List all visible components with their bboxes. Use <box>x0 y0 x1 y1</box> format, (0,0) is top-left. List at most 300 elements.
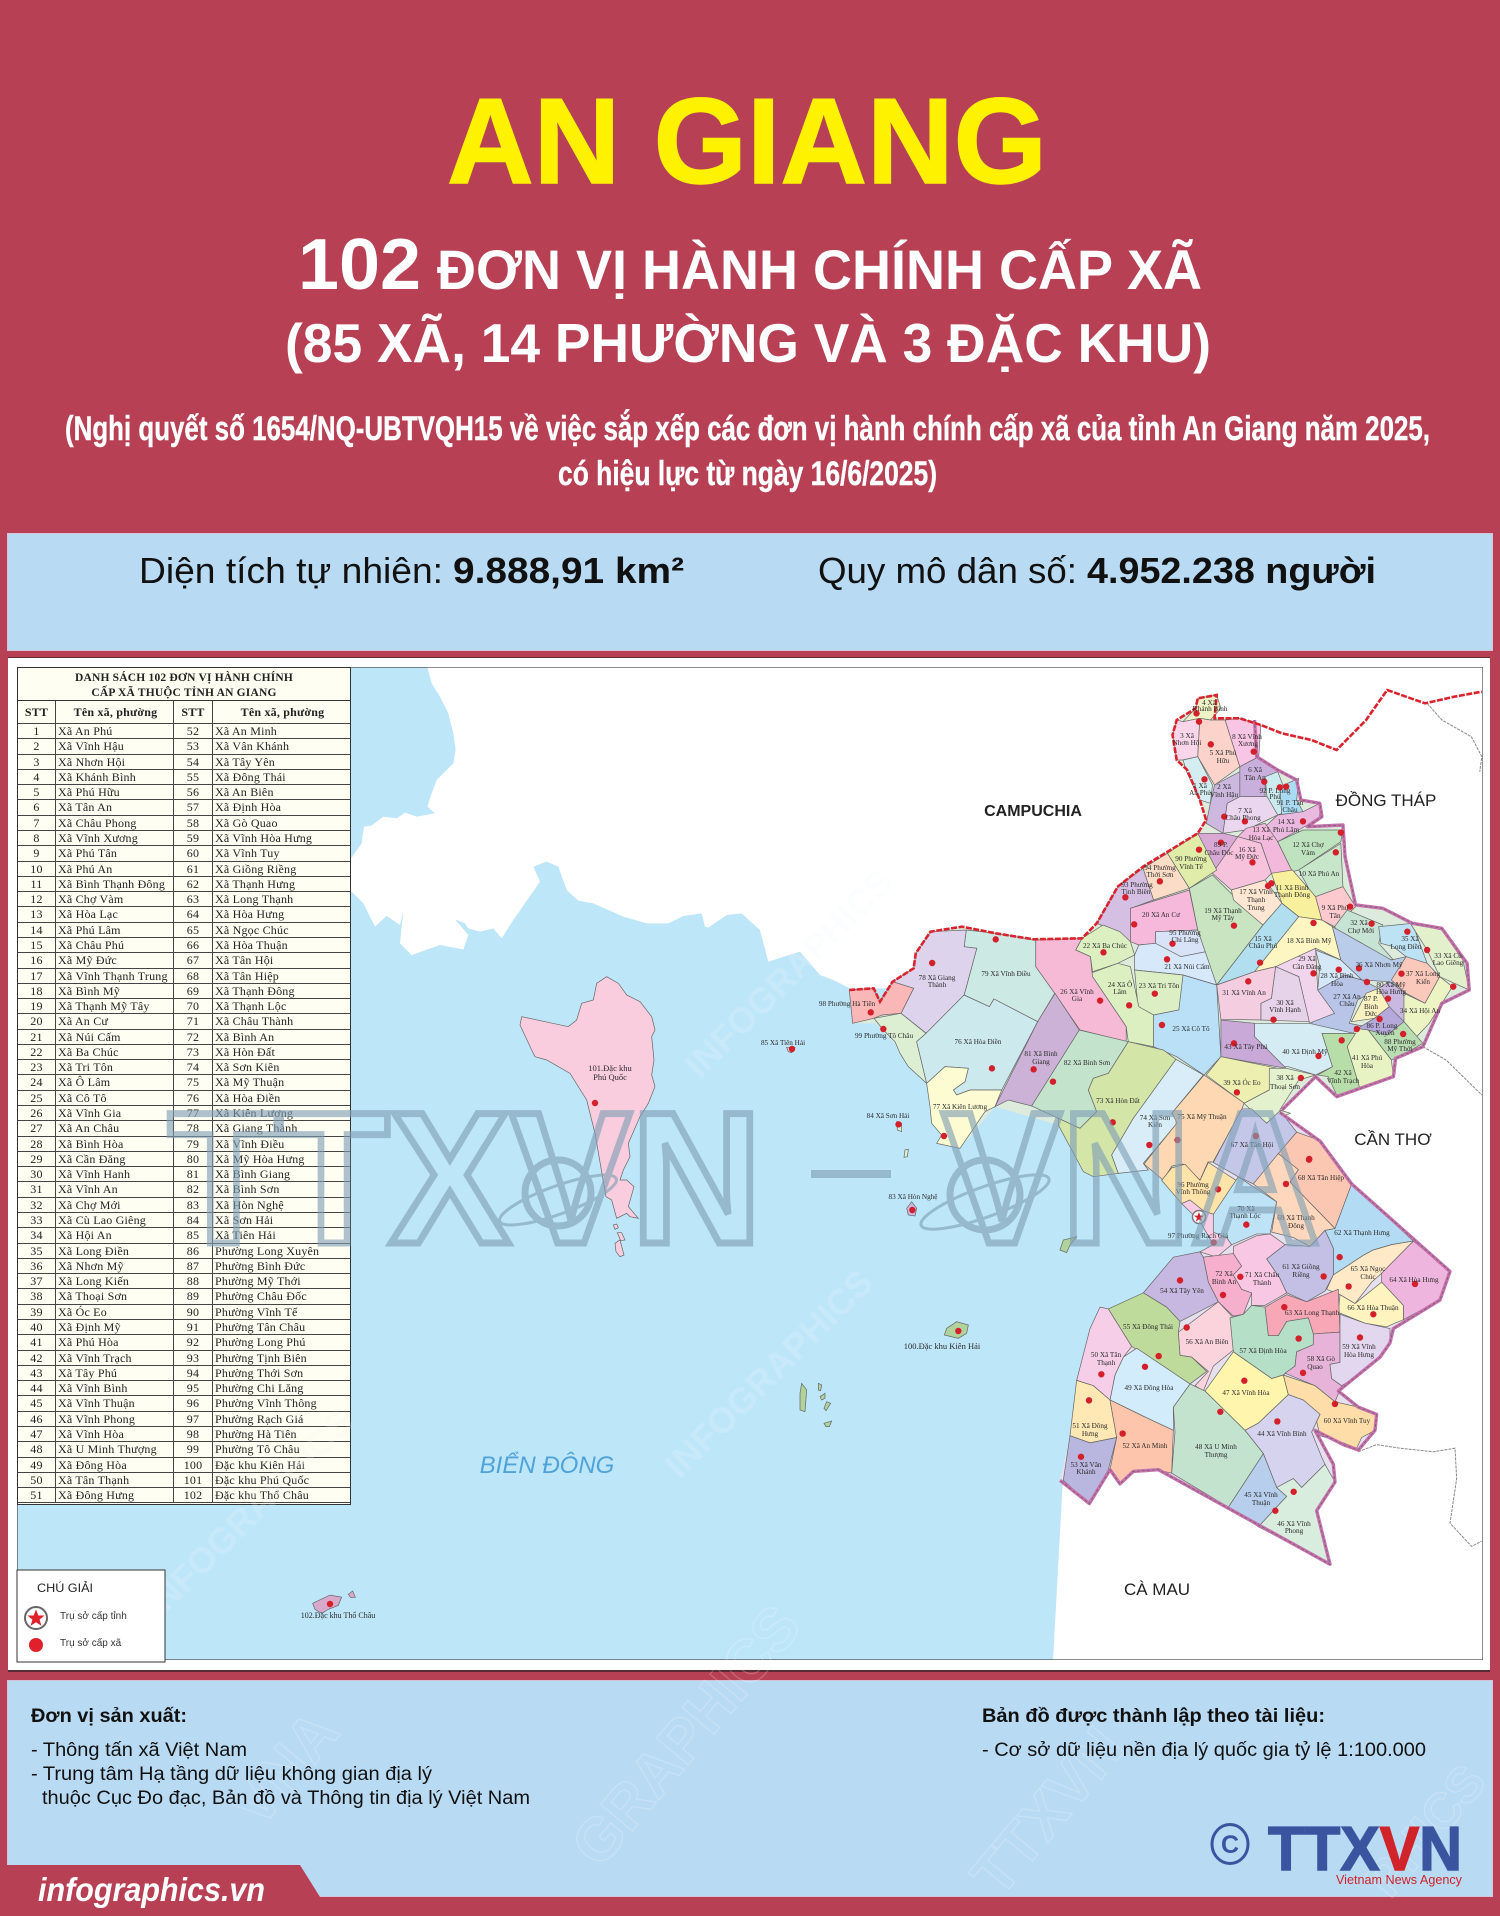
table rows: Xã Mỹ Đức <box>58 953 117 967</box>
commune labels: 77 Xã Kiên Lương <box>933 1103 988 1111</box>
province underlay: south <box>1060 1120 1408 1491</box>
table rows: 69 <box>187 984 199 998</box>
table rows: 56 <box>187 785 199 799</box>
table rows: Phường Long Phú <box>215 1335 306 1349</box>
commune labels: 64 Xã Hòa Hưng <box>1389 1276 1439 1284</box>
commune labels: Vĩnh Tế <box>1179 863 1204 871</box>
commune labels: 55 Xã Đông Thái <box>1123 1323 1173 1331</box>
commune labels: Thạnh <box>1247 896 1266 904</box>
commune labels: Cần Đăng <box>1293 963 1322 971</box>
commune labels <box>301 699 1464 1620</box>
commune labels: Mỹ Tây <box>1212 914 1235 922</box>
commune labels: Vàm <box>1301 849 1315 857</box>
table rows: 24 <box>30 1075 43 1089</box>
table rows: 10 <box>30 862 43 876</box>
islands <box>800 1122 1077 1427</box>
table rows: Xã Đông Thái <box>215 770 286 784</box>
table rows: 15 <box>30 938 43 952</box>
table rows: 83 <box>187 1198 199 1212</box>
table rows: Xã Định Mỹ <box>58 1320 121 1334</box>
table rows: 43 <box>30 1366 43 1380</box>
commune labels: Riềng <box>1292 1271 1310 1279</box>
commune headquarters dots: north <box>868 710 1456 1162</box>
commune labels: 60 Xã Vĩnh Tuy <box>1324 1417 1371 1425</box>
stat: population: Quy mô dân số: <box>818 550 1077 591</box>
table rows: 8 <box>33 831 40 845</box>
table rows: Xã Giang Thành <box>215 1121 298 1135</box>
table rows: Đặc khu Thổ Châu <box>215 1488 309 1502</box>
commune labels: Vĩnh Trạch <box>1327 1077 1360 1085</box>
frontier: red Cambodia border <box>849 690 1482 1002</box>
commune labels: 21 Xã Núi Cấm <box>1164 963 1210 971</box>
commune labels: 98 Phường Hà Tiên <box>819 1000 876 1008</box>
province boundary: pink south <box>1060 1112 1450 1564</box>
commune labels: 7 Xã <box>1238 807 1253 815</box>
commune labels: 39 Xã Óc Eo <box>1223 1077 1261 1087</box>
table rows: 74 <box>187 1060 199 1074</box>
table rows: STT <box>25 705 48 719</box>
table rows: Xã Tân Hiệp <box>215 968 279 982</box>
table rows: 28 <box>30 1137 43 1151</box>
table rows: 20 <box>30 1014 43 1028</box>
map border <box>17 667 1483 1660</box>
commune labels: 87 P. <box>1364 995 1378 1003</box>
table rows: 52 <box>187 724 199 738</box>
table rows: Đặc khu Kiên Hải <box>215 1458 305 1472</box>
commune labels: Mỹ Thới <box>1387 1045 1413 1053</box>
commune labels: 33 Xã Cù <box>1434 952 1462 960</box>
commune labels: 67 Xã Tân Hội <box>1231 1141 1273 1149</box>
commune labels: 17 Xã Vĩnh <box>1239 888 1273 896</box>
table rows: 3 <box>33 755 40 769</box>
table rows: Xã Long Kiến <box>58 1274 129 1288</box>
table rows: Xã Châu Phong <box>58 816 137 830</box>
commune labels: 25 Xã Cô Tô <box>1172 1025 1210 1033</box>
table rows: Xã Nhơn Hội <box>58 755 125 769</box>
table rows: 5 <box>33 785 40 799</box>
table rows: Xã An Phú <box>58 724 112 738</box>
table rows: 21 <box>30 1030 43 1044</box>
table rows: 61 <box>187 862 199 876</box>
commune labels: 18 Xã Bình Mỹ <box>1287 937 1332 945</box>
commune labels: 46 Xã Vĩnh <box>1277 1520 1311 1528</box>
communes: south <box>1063 1109 1450 1564</box>
commune labels: An Phú <box>1189 789 1211 797</box>
commune labels: 101.Đặc khu <box>588 1063 632 1073</box>
table rows: 54 <box>187 755 199 769</box>
table rows: Phường Vĩnh Thông <box>215 1396 317 1410</box>
table rows: Xã An Biên <box>215 785 274 799</box>
table rows: 99 <box>187 1442 199 1456</box>
commune labels: 68 Xã Tân Hiệp <box>1298 1174 1344 1182</box>
table rows: Xã Ba Chúc <box>58 1045 119 1059</box>
table rows: Phường Vĩnh Tế <box>215 1305 298 1319</box>
table rows: 58 <box>187 816 199 830</box>
commune labels: Châu Đốc <box>1205 849 1233 857</box>
logo: TTXVN: C <box>1221 1831 1239 1859</box>
table rows: 23 <box>30 1060 43 1074</box>
commune labels: 5 Xã Phú <box>1210 749 1237 757</box>
table rows: 81 <box>187 1167 199 1181</box>
table rows: Xã Sơn Hải <box>215 1213 273 1227</box>
table rows: 36 <box>30 1259 43 1273</box>
commune labels: 2 Xã <box>1217 783 1232 791</box>
table rows: Xã Giồng Riềng <box>215 862 296 876</box>
province boundary: inner dashes north-east <box>1255 720 1469 1110</box>
commune labels: 54 Xã Tây Yên <box>1160 1287 1204 1295</box>
table rows: 42 <box>30 1351 43 1365</box>
commune labels: Gia <box>1072 995 1083 1003</box>
commune labels: Thành <box>928 981 947 989</box>
table rows: Xã U Minh Thượng <box>58 1442 157 1456</box>
table rows: Xã Long Thạnh <box>215 892 293 906</box>
commune labels: 16 Xã <box>1238 846 1256 854</box>
table rows: Xã An Minh <box>215 724 277 738</box>
commune labels: 23 Xã Tri Tôn <box>1139 982 1180 990</box>
label: Bien Dong: BIỂN ĐÔNG <box>480 1451 614 1479</box>
commune labels: 102.Đặc khu Thổ Châu <box>301 1611 375 1620</box>
table rows: Phường Thới Sơn <box>215 1366 303 1380</box>
table rows: Xã Vĩnh Gia <box>58 1106 121 1120</box>
table rows: 96 <box>187 1396 199 1410</box>
table rows: 40 <box>30 1320 43 1334</box>
land: north coast <box>351 667 1500 988</box>
commune labels: 22 Xã Ba Chúc <box>1083 942 1127 950</box>
table rows: Phường Hà Tiên <box>215 1427 297 1441</box>
table rows: Phường Bình Đức <box>215 1259 305 1273</box>
table rows: Xã Ngọc Chúc <box>215 923 289 937</box>
commune labels: 86 P. Long <box>1367 1022 1398 1030</box>
commune labels: Xuyên <box>1375 1029 1395 1037</box>
commune labels: Kiến <box>1416 978 1430 986</box>
commune labels: Tân <box>1329 912 1341 920</box>
panel: stats background <box>7 533 1493 651</box>
table rows: Xã Hòa Hưng <box>215 907 284 921</box>
table rows: Xã Hòn Nghệ <box>215 1198 284 1212</box>
table rows: 29 <box>30 1152 43 1166</box>
table rows: Xã Chợ Vàm <box>58 892 123 906</box>
logo: TTXVN: Vietnam News Agency <box>1336 1872 1462 1887</box>
footer: producers: Đơn vị sản xuất: <box>31 1706 187 1727</box>
table rows: 51 <box>30 1488 43 1502</box>
commune labels: 93 Phường <box>1121 881 1153 889</box>
table rows: Xã Phú Hữu <box>58 785 120 799</box>
commune labels: 58 Xã Gò <box>1307 1355 1335 1363</box>
commune labels: Châu <box>1339 1000 1355 1008</box>
footer tab <box>0 1865 320 1898</box>
commune labels: 14 Xã <box>1277 818 1295 826</box>
table rows: 26 <box>30 1106 43 1120</box>
table rows: 75 <box>187 1075 199 1089</box>
commune labels: Lao Giêng <box>1433 959 1464 967</box>
table rows: 50 <box>30 1473 43 1487</box>
table rows: 65 <box>187 923 199 937</box>
table rows: 55 <box>187 770 199 784</box>
table rows: 46 <box>30 1412 43 1426</box>
table rows: 48 <box>30 1442 43 1456</box>
table rows: Xã Hòa Lạc <box>58 907 118 921</box>
commune labels: Đức <box>1365 1010 1377 1018</box>
resolution note: có hiệu lực từ ngày 16/6/2025) <box>558 455 937 493</box>
table rows: Xã Hòa Thuận <box>215 938 288 952</box>
table rows: Xã Thạnh Mỹ Tây <box>58 999 150 1013</box>
table rows: 70 <box>187 999 199 1013</box>
legend: commune dot: Trụ sở cấp xã <box>60 1637 122 1649</box>
icon: provincial capital star <box>1192 1210 1206 1224</box>
footer: producers: - Thông tấn xã Việt Nam <box>31 1740 247 1761</box>
table rows: 7 <box>33 816 40 830</box>
table rows: 11 <box>31 877 42 891</box>
commune labels: 47 Xã Vĩnh Hòa <box>1222 1389 1270 1397</box>
commune labels: 52 Xã An Minh <box>1123 1442 1168 1450</box>
commune labels: Thuận <box>1252 1499 1271 1507</box>
commune labels: 24 Xã Ô <box>1108 979 1132 989</box>
table rows: Xã Bình Thạnh Đông <box>58 877 165 891</box>
table rows: Xã Tây Yên <box>215 755 275 769</box>
table rows: Xã Đông Hòa <box>58 1458 127 1472</box>
commune labels: 63 Xã Long Thạnh <box>1285 1309 1340 1317</box>
label: Dong Thap: ĐỒNG THÁP <box>1336 791 1436 810</box>
commune labels: 79 Xã Vĩnh Điều <box>981 970 1031 978</box>
table rows: Xã Phú An <box>58 862 112 876</box>
overlay: header, stats, legend, watermark, footer: INFOGRAPHICS <box>677 861 901 1086</box>
table rows: Xã Vĩnh Hòa <box>58 1427 124 1441</box>
table rows: 12 <box>30 892 43 906</box>
table rows: 47 <box>30 1427 43 1441</box>
table rows: 31 <box>30 1182 43 1196</box>
table rows: Xã Tân Thạnh <box>58 1473 129 1487</box>
legend: provincial star: Trụ sở cấp tỉnh <box>60 1610 127 1622</box>
table rows: 71 <box>187 1014 199 1028</box>
table rows: 6 <box>33 800 40 814</box>
table rows: 89 <box>187 1289 199 1303</box>
commune labels: 65 Xã Ngọc <box>1351 1265 1385 1273</box>
table rows: Xã Vĩnh Bình <box>58 1381 128 1395</box>
commune labels: 31 Xã Vĩnh An <box>1222 989 1266 997</box>
table rows: 16 <box>30 953 43 967</box>
legend: commune dot <box>29 1637 122 1652</box>
commune labels: Châu Phong <box>1225 814 1261 822</box>
commune labels: 76 Xã Hòa Điền <box>955 1038 1002 1046</box>
table rows: 13 <box>30 907 43 921</box>
commune labels: Vĩnh Hạnh <box>1269 1006 1301 1014</box>
special zone dots <box>327 1046 962 1607</box>
commune labels: Hưng <box>1082 1430 1099 1438</box>
commune labels: 27 Xã An <box>1333 993 1361 1001</box>
province boundary: inner dashes south <box>1060 1112 1450 1564</box>
commune labels: Bình <box>1364 1003 1378 1011</box>
table rows: Xã Ô Lâm <box>58 1075 110 1089</box>
commune labels: Hữu <box>1217 757 1230 765</box>
footer: producers: - Trung tâm Hạ tầng dữ liệu không gian địa lý <box>31 1764 433 1785</box>
table rows: 92 <box>187 1335 199 1349</box>
logo: TTXVN: TTXVN <box>1268 1815 1462 1884</box>
table rows: 86 <box>187 1244 199 1258</box>
commune labels: 45 Xã Vĩnh <box>1244 1491 1278 1499</box>
commune labels: Thạnh <box>1097 1359 1116 1367</box>
commune labels: 69 Xã Thạnh <box>1277 1214 1315 1222</box>
commune labels: 19 Xã Thạnh <box>1204 907 1242 915</box>
table rows: Xã Phú Lâm <box>58 923 121 937</box>
table rows: 94 <box>187 1366 199 1380</box>
commune labels: Hòa Hưng <box>1376 988 1406 996</box>
table rows: 67 <box>187 953 199 967</box>
commune labels: Nhơn Hội <box>1173 739 1201 747</box>
table rows: Xã Cần Đăng <box>58 1152 126 1166</box>
table rows: Xã Tây Phú <box>58 1366 117 1380</box>
watermark: faint diagonal text: PHICS <box>1356 1754 1497 1907</box>
footer: producers: thuộc Cục Đo đạc, Bản đồ và Thông tin địa lý Việt Nam <box>42 1788 530 1809</box>
label: Ca Mau: CÀ MAU <box>1124 1580 1190 1599</box>
table rows: Phường Tịnh Biên <box>215 1351 307 1365</box>
commune list table <box>17 667 351 1504</box>
table title <box>18 668 350 701</box>
table rows: Xã Gò Quao <box>215 816 278 830</box>
map <box>17 667 1483 1660</box>
commune labels: Kiên <box>1148 1121 1162 1129</box>
table rows: 49 <box>30 1458 43 1472</box>
table rows: 37 <box>30 1274 43 1288</box>
commune labels: 3 Xã <box>1180 732 1195 740</box>
commune labels: 96 Phường <box>1177 1181 1209 1189</box>
table rows: 100 <box>184 1458 202 1472</box>
table rows: 98 <box>187 1427 199 1441</box>
table rows: 9 <box>33 846 40 860</box>
table rows: 87 <box>187 1259 199 1273</box>
table rows: Xã Vĩnh Hòa Hưng <box>215 831 312 845</box>
table rows: Phường Mỹ Thới <box>215 1274 301 1288</box>
table rows: Xã Định Hòa <box>215 800 281 814</box>
stat: area: Diện tích tự nhiên: <box>139 550 443 591</box>
table rows: Xã Óc Eo <box>58 1305 107 1319</box>
footer: sources: - Cơ sở dữ liệu nền địa lý quốc gia tỷ lệ 1:100.000 <box>982 1740 1426 1761</box>
table rows: Tên xã, phường <box>241 705 324 719</box>
stat: population <box>818 550 1376 591</box>
commune labels: Thạnh Đông <box>1274 891 1310 899</box>
commune labels: 42 Xã <box>1334 1069 1352 1077</box>
table rows: 18 <box>30 984 43 998</box>
commune labels: Vĩnh Thông <box>1176 1188 1211 1196</box>
table rows: 4 <box>33 770 40 784</box>
table rows: Xã Vĩnh Phong <box>58 1412 135 1426</box>
subtitle line 2: (85 XÃ, 14 PHƯỜNG VÀ 3 ĐẶC KHU) <box>285 312 1211 374</box>
commune labels: 30 Xã <box>1276 999 1294 1007</box>
site name: infographics.vn <box>38 1871 265 1908</box>
table rows: Xã Thạnh Đông <box>215 984 295 998</box>
table rows: 62 <box>187 877 199 891</box>
commune labels: 10 Xã Phú An <box>1299 870 1340 878</box>
commune labels: 32 Xã <box>1350 919 1368 927</box>
table rows: 33 <box>30 1213 43 1227</box>
commune labels: Giang <box>1032 1058 1050 1066</box>
table rows: 76 <box>187 1091 199 1105</box>
table rows: 19 <box>30 999 43 1013</box>
table rows: 2 <box>33 739 40 753</box>
commune labels: 12 Xã Chợ <box>1292 841 1324 849</box>
table rows: 14 <box>30 923 43 937</box>
commune labels: 88 Phường <box>1384 1038 1416 1046</box>
commune labels: Vĩnh Hậu <box>1210 791 1238 799</box>
commune labels: 37 Xã Long <box>1406 970 1441 978</box>
commune labels: Hòa Lạc <box>1249 834 1273 842</box>
table rows: 66 <box>187 938 199 952</box>
table rows: Xã Tri Tôn <box>58 1060 113 1074</box>
table rows: Xã Vĩnh Điều <box>215 1137 285 1151</box>
table rows: 1 <box>33 724 40 738</box>
table rows: Xã Kiên Lương <box>215 1106 293 1120</box>
commune labels: 59 Xã Vĩnh <box>1342 1343 1376 1351</box>
commune labels: 41 Xã Phú <box>1352 1054 1383 1062</box>
overlay: header, stats, legend, watermark, footer: INFOGRAPHICS <box>137 1401 361 1626</box>
table rows: Phường Tân Châu <box>215 1320 305 1334</box>
commune labels: 13 Xã <box>1252 826 1270 834</box>
commune labels: 20 Xã An Cư <box>1142 911 1181 919</box>
table rows: 95 <box>187 1381 199 1395</box>
table rows: 63 <box>187 892 199 906</box>
commune labels: 73 Xã Hòn Đất <box>1096 1097 1140 1105</box>
table rows: 60 <box>187 846 199 860</box>
table rows: Đặc khu Phú Quốc <box>215 1473 309 1487</box>
commune labels: 92 P. Long <box>1260 787 1291 795</box>
table rows: 64 <box>187 907 199 921</box>
commune labels: 48 Xã U Minh <box>1195 1443 1237 1451</box>
commune labels: Thạnh Lộc <box>1229 1212 1261 1220</box>
commune labels: Chi Lăng <box>1172 936 1199 944</box>
commune labels: 90 Phường <box>1175 855 1207 863</box>
table rows: Xã Bình Hòa <box>58 1137 124 1151</box>
table rows: 85 <box>187 1228 199 1242</box>
table rows: 91 <box>187 1320 199 1334</box>
commune labels: Khánh <box>1076 1468 1096 1476</box>
sea <box>18 668 1212 1660</box>
overlay: header, stats, legend, watermark, footer: INFOGRAPHICS <box>657 1261 881 1486</box>
subtitle line 1: 102 <box>298 225 421 305</box>
subtitle line 1: ĐƠN VỊ HÀNH CHÍNH CẤP XÃ <box>437 238 1202 301</box>
table rows: 35 <box>30 1244 43 1258</box>
commune labels: 74 Xã Sơn <box>1140 1114 1171 1122</box>
table title: DANH SÁCH 102 ĐƠN VỊ HÀNH CHÍNH <box>75 672 293 684</box>
table rows: Xã Núi Cấm <box>58 1030 121 1044</box>
commune labels: 38 Xã <box>1276 1074 1294 1082</box>
commune labels: 94 Phường <box>1144 864 1176 872</box>
table rows: 57 <box>187 800 199 814</box>
table rows: 90 <box>187 1305 199 1319</box>
commune labels: 34 Xã Hội An <box>1400 1007 1440 1015</box>
table rows: 101 <box>184 1473 202 1487</box>
table rows: 80 <box>187 1152 199 1166</box>
resolution note <box>65 410 1430 493</box>
commune labels: Trung <box>1247 904 1265 912</box>
footer: sources <box>982 1706 1426 1761</box>
legend: provincial star <box>25 1607 127 1629</box>
commune labels: Châu <box>1282 806 1298 814</box>
commune labels: 91 P. Tân <box>1277 799 1304 807</box>
table rows: 73 <box>187 1045 199 1059</box>
table rows: Xã Vĩnh An <box>58 1182 118 1196</box>
watermark: large TTXVN - VNA: VNA <box>942 1073 1320 1283</box>
commune labels: 84 Xã Sơn Hải <box>867 1112 909 1120</box>
panel: footer background <box>7 1680 1493 1897</box>
commune labels: Lâm <box>1113 988 1127 996</box>
table rows: 78 <box>187 1121 199 1135</box>
table rows: Xã Cù Lao Giêng <box>58 1213 146 1227</box>
commune labels: 75 Xã Mỹ Thuận <box>1177 1113 1227 1121</box>
table rows: Xã Thoại Sơn <box>58 1289 127 1303</box>
legend title: CHÚ GIẢI <box>37 1580 93 1595</box>
table rows: Xã Bình Sơn <box>215 1182 280 1196</box>
table rows: 68 <box>187 968 199 982</box>
commune labels: 29 Xã <box>1298 955 1316 963</box>
